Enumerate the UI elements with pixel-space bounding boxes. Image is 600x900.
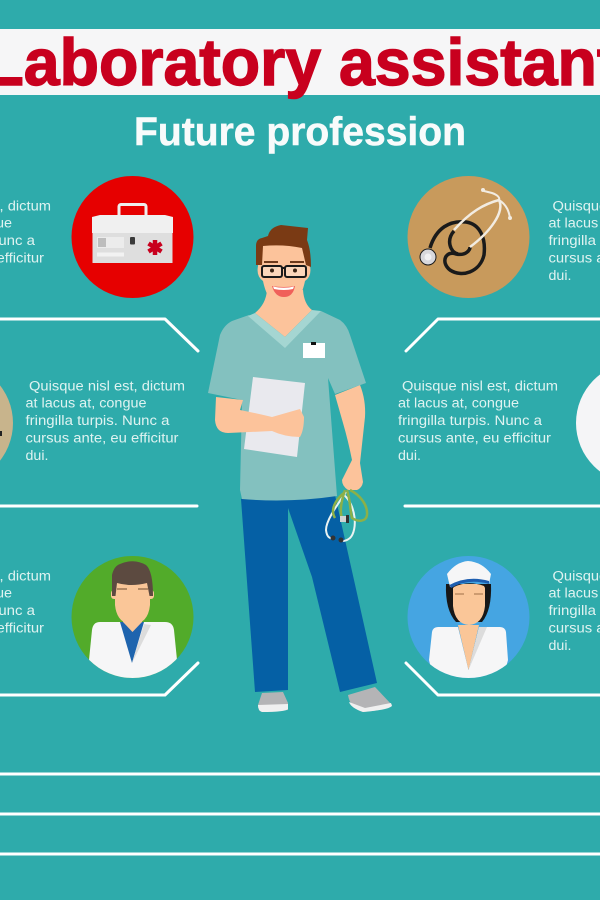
text block: middle right xyxy=(398,378,558,463)
connector lines xyxy=(0,319,600,695)
glasses xyxy=(262,262,306,277)
text block: middle left xyxy=(26,378,185,463)
hair xyxy=(256,225,311,267)
text block: middle right: fringilla turpis. Nunc a xyxy=(398,413,543,428)
right shoe xyxy=(348,687,392,712)
text block: middle right: dui. xyxy=(398,448,421,463)
icon: stethoscope xyxy=(408,176,530,298)
text block: bottom left xyxy=(0,568,51,653)
text block: middle left: fringilla turpis. Nunc a xyxy=(26,413,170,428)
icon: nurse xyxy=(408,556,530,690)
collar xyxy=(248,310,321,348)
head xyxy=(258,245,310,308)
left shoe xyxy=(258,692,288,712)
neck xyxy=(255,290,312,337)
text block: bottom right: dui. xyxy=(548,638,572,653)
text block: middle right: Quisque nisl est, dictum xyxy=(402,378,558,394)
text block: middle left: at lacus at, congue xyxy=(26,396,146,410)
left arm xyxy=(215,397,304,437)
stethoscope in hand xyxy=(326,490,367,542)
mouth xyxy=(272,286,295,297)
icon: male doctor xyxy=(72,556,194,690)
bottom lines xyxy=(0,774,600,854)
icon: tan circle, partly cropped xyxy=(0,362,13,484)
text block: middle left: cursus ante, eu efficitur xyxy=(26,430,179,446)
icon: white circle, partly cropped xyxy=(576,362,600,484)
text block: middle left: dui. xyxy=(26,448,48,463)
main figure: lab assistant xyxy=(208,225,392,712)
icon: first aid kit xyxy=(72,176,194,298)
text block: middle right: cursus ante, eu efficitur xyxy=(398,430,552,446)
text block: bottom right xyxy=(548,568,600,653)
text block: middle left: Quisque nisl est, dictum xyxy=(29,378,185,394)
scrub top xyxy=(208,311,366,500)
right arm xyxy=(335,385,365,490)
text block: top left xyxy=(0,198,51,283)
text block: middle right: at lacus at, congue xyxy=(398,396,519,410)
subtitle: Future profession xyxy=(134,110,466,154)
trousers xyxy=(241,495,377,692)
name badge xyxy=(303,342,325,358)
text block: top right: dui. xyxy=(548,268,572,283)
clipboard paper xyxy=(244,377,305,457)
text block: top right xyxy=(548,198,600,283)
